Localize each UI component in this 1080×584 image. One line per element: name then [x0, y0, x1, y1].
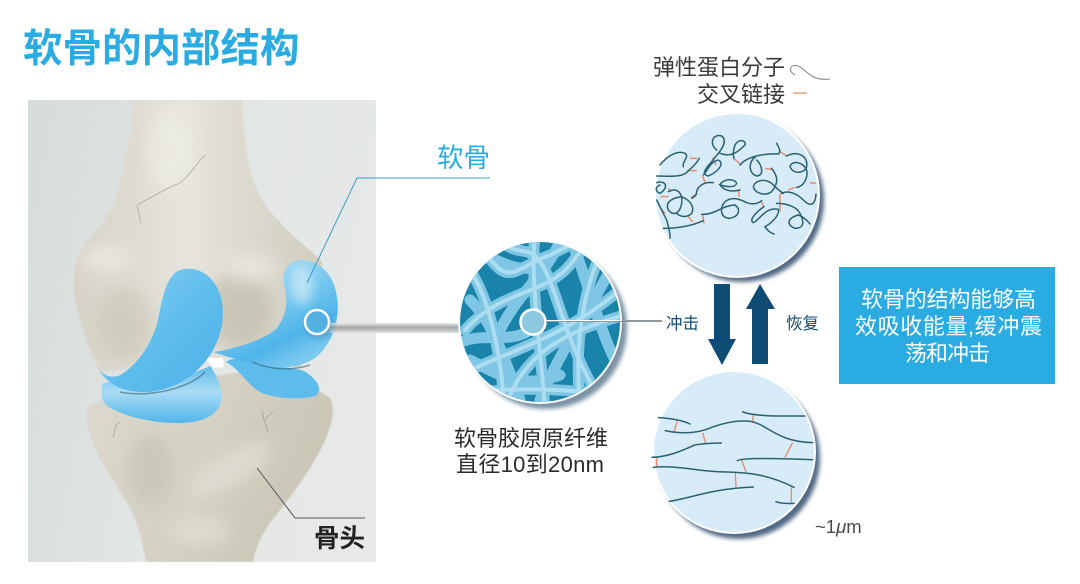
callout: 效吸收能量,缓冲震 — [855, 314, 1042, 339]
legend: elastin molecule and cross-link: 弹性蛋白分子 — [653, 55, 785, 80]
callout: 荡和冲击 — [905, 341, 990, 366]
gap highlight — [205, 358, 224, 368]
left meniscus — [101, 366, 221, 423]
up arrow — [746, 284, 775, 364]
cartilage label — [307, 143, 490, 283]
thin connector line — [546, 320, 662, 322]
recovery label: 恢复 — [786, 314, 819, 333]
cross-links — [657, 415, 793, 503]
cross-links — [661, 152, 816, 223]
panel: knee joint illustration — [28, 100, 376, 562]
cartilage shadow — [120, 372, 205, 394]
legend: elastin molecule and cross-link — [653, 55, 830, 107]
bone cracks — [113, 155, 273, 438]
cartilage highlight — [291, 265, 313, 305]
compressed network circle — [652, 370, 820, 539]
elastin strands — [656, 136, 816, 238]
cartilage label: 软骨 — [437, 143, 490, 173]
connector pipe from knee to fibre circle — [330, 323, 376, 333]
scale label: ~1μm — [815, 516, 862, 537]
bone shading — [80, 108, 280, 546]
fibre caption: 软骨胶原原纤维 — [454, 426, 608, 451]
bone label — [257, 468, 365, 553]
callout: 软骨的结构能够高 — [861, 287, 1036, 312]
stretched strands — [652, 412, 813, 503]
small ring on fibre circle — [520, 310, 546, 334]
small ring on knee — [304, 310, 334, 340]
fibre circle — [455, 235, 627, 410]
tibia bone — [87, 372, 333, 562]
impact label: 冲击 — [666, 314, 699, 333]
right femoral cartilage — [213, 260, 338, 367]
title: 软骨的内部结构 — [23, 27, 300, 71]
bone label: 骨头 — [314, 525, 365, 553]
relaxed network circle — [654, 112, 824, 282]
callout — [839, 267, 1055, 384]
fibre caption: 直径10到20nm — [456, 452, 604, 477]
down arrow — [708, 284, 736, 365]
femur bone — [74, 100, 325, 372]
left femoral cartilage — [99, 269, 223, 392]
connector pipe continuing — [376, 323, 460, 333]
right meniscus — [226, 359, 319, 398]
fibre caption — [454, 426, 608, 477]
legend: elastin molecule and cross-link: 交叉链接 — [697, 82, 785, 107]
collagen fibres — [460, 242, 620, 402]
